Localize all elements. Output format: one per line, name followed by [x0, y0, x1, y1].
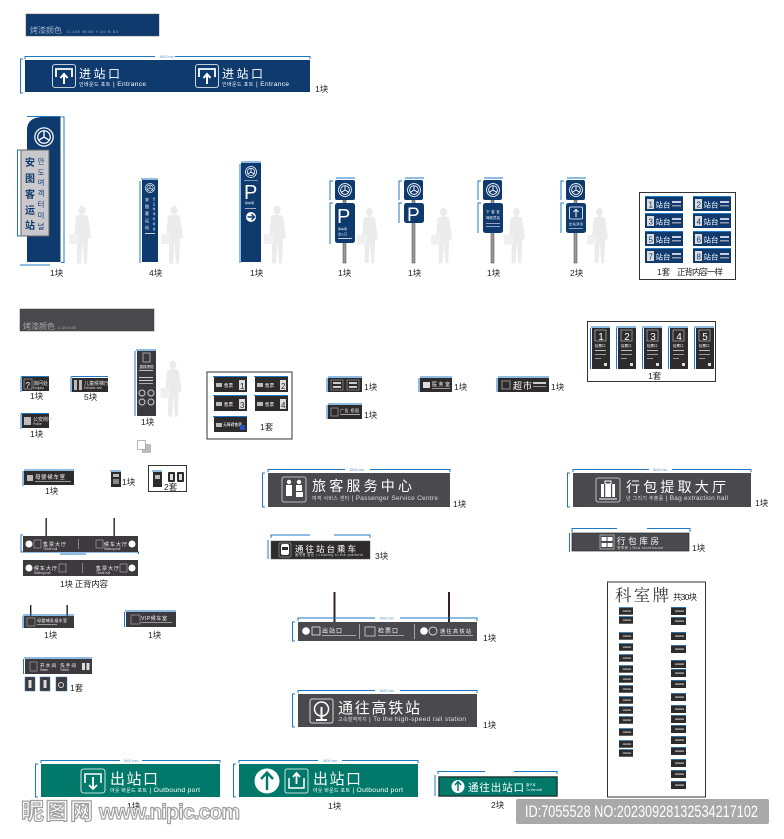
sign: platform 4: 站台 — [704, 216, 718, 226]
slim station totem: 객 — [153, 211, 156, 216]
sign: gate 5: 5 — [702, 332, 708, 343]
quantity label: 1块 正背内容 — [60, 579, 108, 589]
icon: exit box — [285, 769, 308, 793]
pole sign: text panel — [478, 178, 503, 263]
green sign: outbound port — [36, 759, 220, 797]
quantity label: 2块 — [491, 800, 505, 810]
grey colour swatch: C:10 K:85 — [58, 325, 77, 330]
sign: platform 1: 1 — [648, 200, 654, 210]
sign: to high-speed rail station: 고속철역까지 | To the high-speed rail station — [338, 716, 466, 723]
small sign: restroom corridor: 广告 招租 — [340, 407, 359, 413]
panel: check-in numbered signs — [588, 322, 716, 382]
hanging sign: halls front: Waiting hall — [104, 547, 121, 551]
green sign: up arrow outbound port: 아웃 바운드 포트 | Outbound port — [313, 787, 403, 794]
hanging sign: halls back — [23, 560, 138, 576]
large station totem: 图 — [25, 173, 35, 185]
pole sign: parking short: P — [407, 205, 420, 226]
room plate column right — [671, 607, 686, 789]
sign: baggage hall: 년 그리기 추출홀 | Bag extraction hall — [626, 495, 729, 502]
quantity label: 2块 — [570, 268, 584, 278]
panel: platform signs: 1套 — [657, 267, 671, 277]
icon: entrance arrow left — [52, 64, 76, 88]
room plate column left — [619, 607, 633, 757]
large station totem: 安 — [25, 156, 35, 169]
tall elevator sign: 直梯须知 — [140, 364, 154, 369]
slim station totem: 터 — [153, 216, 156, 221]
pole sign: exit: 出站通道 — [569, 221, 583, 226]
sign: platform 2: 2 — [696, 200, 702, 210]
parking totem: P — [244, 182, 257, 204]
watermark id box — [516, 799, 769, 824]
sign: VIP waiting room — [124, 611, 176, 627]
slim station totem: 安 — [145, 196, 149, 202]
quantity label: 1块 — [454, 382, 468, 392]
quantity label: 1块 — [692, 543, 706, 553]
quantity label: 1块 — [487, 268, 501, 278]
navy colour swatch — [26, 14, 159, 36]
panel: room plates: 科室牌 — [615, 582, 669, 606]
quantity label: 1块 — [122, 477, 136, 487]
sign: platform 1 — [645, 196, 683, 211]
parking totem — [240, 162, 261, 263]
sign: platform 8: 站台 — [704, 252, 718, 262]
silhouette person — [504, 208, 525, 264]
slim station totem: 客 — [145, 210, 149, 216]
small sign: public toilet — [21, 414, 53, 429]
green sign: up arrow outbound port — [234, 759, 418, 797]
sign: ticket 3: 3 — [240, 401, 245, 410]
quantity label: 1块 — [148, 630, 162, 640]
sign: ticket 1: 1 — [240, 382, 245, 391]
sign: platform 3: 3 — [648, 218, 654, 226]
quantity label: 1块 — [45, 486, 59, 496]
sign: ticket 4 — [254, 396, 288, 411]
quantity label: 1套 — [70, 683, 84, 693]
icon: up arrow circle — [254, 768, 280, 794]
sign: ticket 1 — [213, 376, 247, 392]
entrance banner sign: 进站口 — [79, 67, 120, 81]
quantity label: 1块 — [364, 410, 378, 420]
small sign: elevator: 儿童候梯厅 — [84, 380, 109, 387]
sign: platform 6: 6 — [696, 236, 702, 244]
sign: baggage hall: 行包提取大厅 — [626, 479, 726, 495]
green sign: up arrow outbound port: 出站口 — [313, 771, 361, 788]
sign: water and washroom: 洗手间 — [60, 662, 76, 669]
sign: gate 5: 检票口 — [699, 343, 710, 348]
panel: ticket office signs — [207, 372, 292, 439]
silhouette person — [357, 208, 378, 264]
hanging sign: exit, ticket check, high-speed rail — [292, 592, 477, 641]
silhouette person — [431, 208, 452, 264]
small sign: elevator — [71, 376, 109, 392]
sign: to high-speed rail station: 5400 mm — [380, 689, 394, 693]
silhouette person — [160, 360, 182, 417]
small sign: elevator: Elevator hall — [84, 386, 102, 390]
panel: platform signs — [640, 192, 736, 280]
sign: gate 3: 检票口 — [647, 343, 658, 348]
panel: room plates — [608, 582, 706, 797]
panel: platform signs: 正背内容一样 — [677, 267, 723, 277]
pole sign: text panel: 下客处 — [486, 209, 500, 214]
tall elevator sign — [135, 350, 156, 416]
icon: baggage — [596, 478, 620, 502]
silhouette person — [587, 208, 608, 264]
sign: gate 3 — [642, 327, 662, 369]
quantity label: 1块 — [30, 391, 44, 401]
pole sign: parking with details: 出入口 — [338, 231, 347, 236]
panel: two sets of tiny signs — [148, 466, 186, 492]
large station totem: 运 — [25, 205, 35, 217]
green sign: up arrow outbound port: 5400 mm — [323, 759, 337, 763]
sign: water and washroom: 开水间 — [40, 662, 56, 669]
small sign: security room: 母婴候车室 — [35, 473, 65, 481]
small sign: enquiry: Enquiry — [33, 386, 44, 390]
large station totem: 객 — [38, 188, 45, 198]
large station totem: 미 — [38, 211, 44, 220]
pole sign: exit — [561, 178, 586, 263]
sign: gate 3: 3 — [650, 332, 656, 343]
sign: to high-speed rail station — [292, 689, 477, 727]
small sign: enquiry: ? — [26, 381, 30, 390]
hanging sign: halls back: 售票大厅 — [96, 565, 119, 572]
quantity label: 1块 — [315, 84, 329, 94]
quantity label: 3块 — [375, 551, 389, 561]
sign: gate 5 — [694, 327, 714, 369]
quantity label: 1块 — [551, 382, 565, 392]
icon: service people — [282, 477, 306, 502]
small sign: public toilet: 公安岗亭 — [33, 416, 53, 423]
sign: gate 1 — [590, 327, 610, 369]
sign: ticket 3 — [213, 396, 247, 411]
icon: railway logo — [310, 699, 333, 723]
quantity label: 1块 — [127, 801, 141, 811]
slim station totem: 널 — [153, 226, 156, 231]
hanging sign: halls front — [20, 518, 138, 554]
quantity label: 1块 — [44, 630, 58, 640]
sign: to platform — [268, 535, 370, 559]
quantity label: 1块 — [141, 417, 155, 427]
sign: gate 2 — [616, 327, 636, 369]
large station totem: 站 — [25, 219, 35, 232]
hanging sign: mother and baby room: 母婴哺乳候车室 — [37, 617, 67, 623]
navy colour swatch: C:100 M:80 Y:10 K:53 — [67, 29, 119, 34]
sign: platform 8: 8 — [696, 252, 702, 262]
sign: baggage hall — [568, 468, 751, 507]
sign: passenger service centre: 5400 mm — [350, 468, 364, 472]
slim station totem — [140, 179, 158, 263]
sign: platform 5: 5 — [648, 236, 654, 244]
panel: two sets of tiny signs: 2套 — [164, 482, 178, 492]
sign: disabled ticket: 无障碍售票 — [223, 422, 242, 427]
navy colour swatch: 烤漆颜色 — [30, 25, 62, 35]
watermark logo: www.nipic.com — [98, 801, 240, 824]
quantity label: 1块 — [755, 498, 769, 508]
quantity label: 5块 — [84, 392, 98, 402]
hanging sign: halls back: Ticket hall — [96, 571, 111, 575]
sign: luggage storage: 行包库房 — [617, 536, 659, 546]
sign: platform 3 — [645, 214, 683, 228]
sign: to high-speed rail station: 通往高铁站 — [338, 700, 420, 717]
quantity label: 1块 — [328, 801, 342, 811]
watermark logo — [21, 798, 240, 824]
large station totem: 여 — [38, 177, 44, 187]
sign: gate 2: 检票口 — [621, 343, 632, 348]
entrance banner sign: 인바운드 포트 | Entrance — [222, 81, 289, 88]
entrance banner sign: 인바운드 포트 | Entrance — [79, 81, 146, 88]
sign: passenger service centre: 여객 서비스 센터 | Passenger Service Centre — [312, 495, 438, 502]
icon: entrance arrow right — [196, 64, 218, 88]
quantity label: 1块 — [250, 268, 264, 278]
hanging sign: halls back: 候车大厅 — [34, 565, 57, 572]
sign: gate 1: 检票口 — [595, 343, 606, 348]
sign: platform 7 — [645, 248, 683, 263]
hanging sign: mother and baby room — [23, 605, 74, 628]
hanging sign: exit, ticket check, high-speed rail: 出站口 — [322, 627, 342, 635]
sign: water and washroom: Toilets — [60, 668, 69, 672]
silhouette person — [161, 206, 183, 264]
entrance banner sign: 8600 mm — [160, 55, 174, 59]
sign: gate 4: 4 — [676, 332, 682, 343]
hanging sign: exit, ticket check, high-speed rail: 5400 mm — [380, 616, 394, 620]
sign: ticket 4: 售票 — [265, 401, 274, 408]
sign: platform 4 — [693, 214, 731, 228]
pole sign: text panel: 驾驶员站 — [486, 215, 500, 220]
small sign: security room — [23, 470, 74, 486]
quantity label: 4块 — [149, 268, 163, 278]
sign: VIP waiting room: VIP候车室 — [141, 615, 167, 622]
sign: ticket 2: 售票 — [265, 382, 274, 389]
sign: ticket 3: 售票 — [224, 401, 233, 408]
pole sign: parking with details — [330, 178, 355, 263]
sign: platform 4: 4 — [696, 218, 702, 226]
sign: platform 8 — [693, 248, 731, 263]
quantity label: 1块 — [338, 268, 352, 278]
sign: platform 2 — [693, 196, 731, 211]
large station totem: 안 — [38, 156, 45, 166]
entrance banner sign: 进站口 — [222, 67, 263, 81]
green sign: outbound port: 出站口 — [110, 771, 158, 788]
sign: platform 6 — [693, 232, 731, 246]
slim station totem: 미 — [153, 221, 156, 226]
pole sign: parking short — [399, 178, 424, 263]
grey colour swatch — [20, 309, 154, 331]
slim station totem: 图 — [145, 203, 149, 209]
quantity label: 1块 — [453, 499, 467, 509]
hanging sign: exit, ticket check, high-speed rail: 检票口 — [378, 627, 398, 635]
small sign: boarding gates — [327, 377, 362, 392]
sign: to platform: 플랫폼 탑승 | Leading to the platform — [295, 552, 363, 557]
hanging sign: exit, ticket check, high-speed rail: 通往高铁站 — [440, 628, 471, 635]
slim station totem: 여 — [153, 206, 156, 211]
silhouette person — [69, 206, 91, 264]
green sign: outbound port: 5400 mm — [124, 759, 138, 763]
parking totem: 停车场 — [245, 200, 254, 205]
entrance banner sign — [20, 55, 310, 93]
sign: platform 1: 站台 — [656, 200, 670, 210]
small sign: public toilet: Police — [33, 422, 42, 426]
slim station totem: 안 — [153, 196, 156, 201]
green sign: to exit: 通往出站口 — [468, 781, 524, 794]
sign: platform 6: 站台 — [704, 234, 718, 244]
sign: gate 1: 1 — [598, 332, 604, 343]
silhouette person — [264, 206, 286, 264]
icon: storage shelves — [600, 535, 614, 549]
large station totem: 客 — [25, 188, 35, 201]
small sign: enquiry — [21, 376, 49, 392]
small sign: supermarket: 超市 — [513, 380, 532, 391]
icon: down arrow — [81, 769, 105, 793]
sign: water and washroom: Water — [40, 668, 49, 672]
sign: platform 7: 7 — [648, 252, 654, 262]
sign: platform 3: 站台 — [656, 216, 670, 226]
sign: to platform: 通往站台乘车 — [295, 544, 356, 554]
sign: passenger service centre — [262, 468, 450, 507]
sign: gate 2: 2 — [624, 332, 630, 343]
watermark logo: 昵图网 — [21, 798, 93, 824]
green sign: outbound port: 아웃 바운드 포트 | Outbound port — [110, 787, 200, 794]
slim station totem: 도 — [153, 202, 156, 206]
sign: platform 5: 站台 — [656, 234, 670, 244]
hanging sign: halls front: 售票大厅 — [43, 541, 66, 548]
quantity label: 1块 — [483, 633, 497, 643]
sign: platform 5 — [645, 232, 683, 246]
hanging sign: halls front: 候车大厅 — [104, 541, 127, 548]
quantity label: 1块 — [408, 268, 422, 278]
slim station totem: 运 — [145, 217, 149, 223]
sign: passenger service centre: 旅客服务中心 — [312, 478, 412, 494]
sign: ticket 2 — [254, 376, 288, 392]
pole sign: parking with details: P — [337, 206, 350, 228]
large station totem — [18, 116, 64, 265]
panel: ticket office signs: 1套 — [260, 422, 274, 432]
sign: ticket 4: 4 — [281, 401, 286, 410]
green sign: to exit — [435, 772, 557, 796]
green sign: to exit: 출구로 — [526, 782, 536, 787]
large station totem: 터 — [38, 200, 44, 209]
small sign: medical room — [419, 377, 452, 392]
slim station totem: 站 — [145, 224, 149, 230]
small sign: medical room: 医务室 — [432, 381, 450, 388]
sign: baggage hall: 5400 mm — [653, 468, 667, 472]
grey colour swatch: 烤漆颜色 — [23, 321, 55, 331]
quantity label: 1块 — [50, 268, 64, 278]
panel: room plates: 共30块 — [673, 592, 697, 602]
quantity label: 1块 — [364, 382, 378, 392]
pole sign: parking with details: 停车场 — [338, 226, 347, 231]
toilet door signs — [25, 677, 67, 691]
sign: gate 4: 检票口 — [673, 343, 684, 348]
large station totem: 도 — [38, 168, 45, 177]
sign: water and washroom — [24, 658, 92, 674]
icon: overlapping squares — [138, 440, 151, 453]
sign: ticket 2: 2 — [281, 382, 286, 391]
sign: luggage storage: 행李房 | Row storehouse — [617, 545, 663, 550]
hanging sign: halls back: Waiting hall — [34, 571, 51, 575]
sign: ticket 1: 售票 — [224, 382, 233, 389]
small sign: supermarket — [497, 377, 549, 392]
green sign: to exit: To the exit — [526, 788, 542, 792]
icon: train — [279, 543, 291, 557]
sign: gate 4 — [668, 327, 688, 369]
sign: platform 2: 站台 — [704, 200, 718, 210]
small sign: restroom corridor — [327, 404, 362, 419]
quantity label: 1块 — [483, 720, 497, 730]
tiny sign — [110, 471, 121, 487]
large station totem: 널 — [38, 222, 45, 231]
panel: check-in numbered signs: 1套 — [648, 371, 662, 381]
small sign: enquiry: 询问处 — [33, 380, 48, 387]
sign: platform 7: 站台 — [656, 252, 670, 262]
hanging sign: halls front: Ticket hall — [43, 547, 58, 551]
sign: luggage storage — [570, 528, 690, 552]
quantity label: 1块 — [30, 429, 44, 439]
